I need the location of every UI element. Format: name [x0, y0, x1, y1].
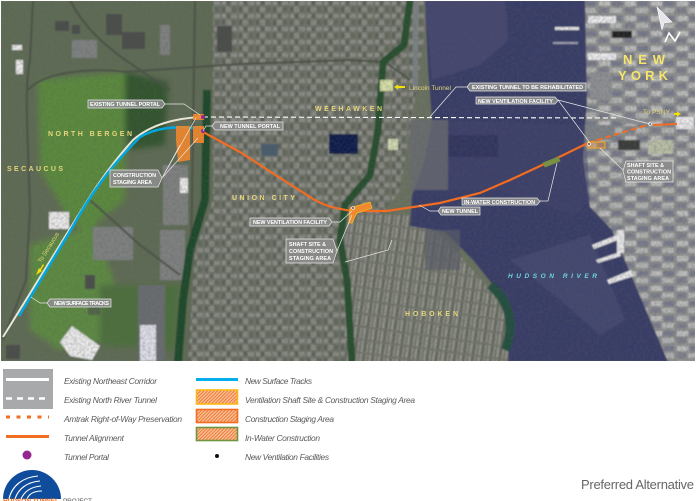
callout: new surface tracks	[47, 299, 111, 307]
place names: To PSNY	[643, 109, 671, 116]
place names: To Secaucus	[38, 232, 61, 264]
logo: hudson tunnel project	[3, 470, 92, 501]
callout: existing tunnel portal	[88, 100, 165, 108]
callout: new tunnel portal	[212, 122, 283, 130]
callout: shaft site west	[286, 239, 337, 263]
leader lines	[31, 87, 650, 303]
callout: shaft site west: STAGING AREA	[289, 256, 331, 262]
tunnel alignment	[203, 124, 677, 211]
legend labels left: Amtrak Right-of-Way Preservation	[63, 414, 182, 424]
legend swatch: ventilation shaft	[196, 390, 238, 404]
callout: new ventilation facility west	[250, 218, 332, 226]
place names: WEEHAWKEN	[315, 106, 382, 113]
aerial map	[0, 0, 696, 362]
legend labels right: Construction Staging Area	[245, 414, 334, 424]
place names: NORTH BERGEN	[48, 131, 132, 138]
legend labels left: Tunnel Portal	[64, 452, 110, 462]
construction staging areas	[176, 114, 204, 162]
legend swatch: tunnel portal	[22, 450, 32, 460]
legend labels right: In-Water Construction	[245, 433, 320, 443]
place names: SECAUCUS	[7, 166, 63, 173]
callout: new ventilation facility east	[476, 97, 558, 105]
shaft sites	[349, 142, 605, 223]
yellow arrows	[36, 84, 681, 275]
callout: construction staging area: STAGING AREA	[113, 180, 152, 186]
place names	[7, 52, 671, 318]
new corridor and surface tracks	[3, 117, 617, 337]
legend swatch: amtrak preservation	[6, 416, 49, 418]
callouts	[47, 83, 673, 307]
callout: new surface tracks: NEW SURFACE TRACKS	[54, 301, 109, 307]
reservoirs	[329, 134, 358, 154]
legend swatch: construction staging	[196, 410, 238, 422]
legend labels left	[63, 376, 182, 462]
legend labels left: Existing Northeast Corridor	[64, 376, 158, 386]
callout: shaft site east	[623, 161, 673, 182]
callout: new tunnel	[438, 207, 480, 215]
place names: HOBOKEN	[405, 311, 458, 318]
callout: new ventilation facility west: NEW VENTILATION FACILITY	[253, 220, 327, 226]
legend labels right	[245, 376, 415, 462]
callout: new tunnel portal: NEW TUNNEL PORTAL	[220, 124, 281, 130]
legend swatch: in-water	[196, 428, 238, 440]
callout: in-water construction: IN-WATER CONSTRUCTION	[464, 200, 535, 206]
legend labels left: Tunnel Alignment	[64, 433, 125, 443]
place names: NEW	[623, 52, 666, 67]
legend swatch: new surface tracks	[196, 378, 238, 381]
place names: Lincoln Tunnel	[409, 85, 452, 92]
legend	[3, 369, 415, 462]
legend labels right: New Ventilation Facilities	[245, 452, 330, 462]
legend labels left: Existing North River Tunnel	[64, 395, 158, 405]
green cliff strips	[178, 0, 510, 362]
callout: construction staging area: CONSTRUCTION	[113, 173, 156, 179]
legend swatch: gray corridor block	[3, 369, 53, 409]
legend labels right: New Surface Tracks	[245, 376, 313, 386]
caption: preferred alternative: Preferred Alternative	[581, 477, 694, 492]
gray industrial blocks	[6, 14, 232, 359]
callout: construction staging area	[110, 170, 162, 187]
legend labels right: Ventilation Shaft Site & Construction Staging Area	[245, 395, 415, 405]
portals and vents	[201, 115, 652, 210]
callout: existing tunnel to be rehabilitated	[467, 83, 586, 91]
legend swatch: tunnel alignment	[6, 435, 49, 438]
noise texture	[1, 1, 695, 361]
callout: in-water construction	[462, 198, 540, 206]
callout: new tunnel: NEW TUNNEL	[442, 209, 479, 215]
place names: HUDSON RIVER	[508, 273, 597, 280]
place names: YORK	[618, 68, 669, 83]
piers	[553, 16, 694, 284]
callout: shaft site east: STAGING AREA	[627, 176, 669, 182]
north arrow	[657, 7, 680, 42]
callout: existing tunnel portal: EXISTING TUNNEL PORTAL	[90, 102, 161, 108]
callout: shaft site east: SHAFT SITE &	[627, 163, 664, 169]
place names: UNION CITY	[232, 195, 295, 202]
callout: shaft site west: SHAFT SITE &	[289, 242, 326, 248]
callout: shaft site west: CONSTRUCTION	[289, 249, 333, 255]
callout: shaft site east: CONSTRUCTION	[627, 170, 671, 176]
callout: new ventilation facility east: NEW VENTILATION FACILITY	[478, 99, 553, 105]
callout: existing tunnel to be rehabilitated: EXISTING TUNNEL TO BE REHABILITATED	[472, 85, 583, 91]
rail and road corridors	[3, 0, 410, 340]
legend swatch: ventilation dot	[215, 454, 219, 458]
